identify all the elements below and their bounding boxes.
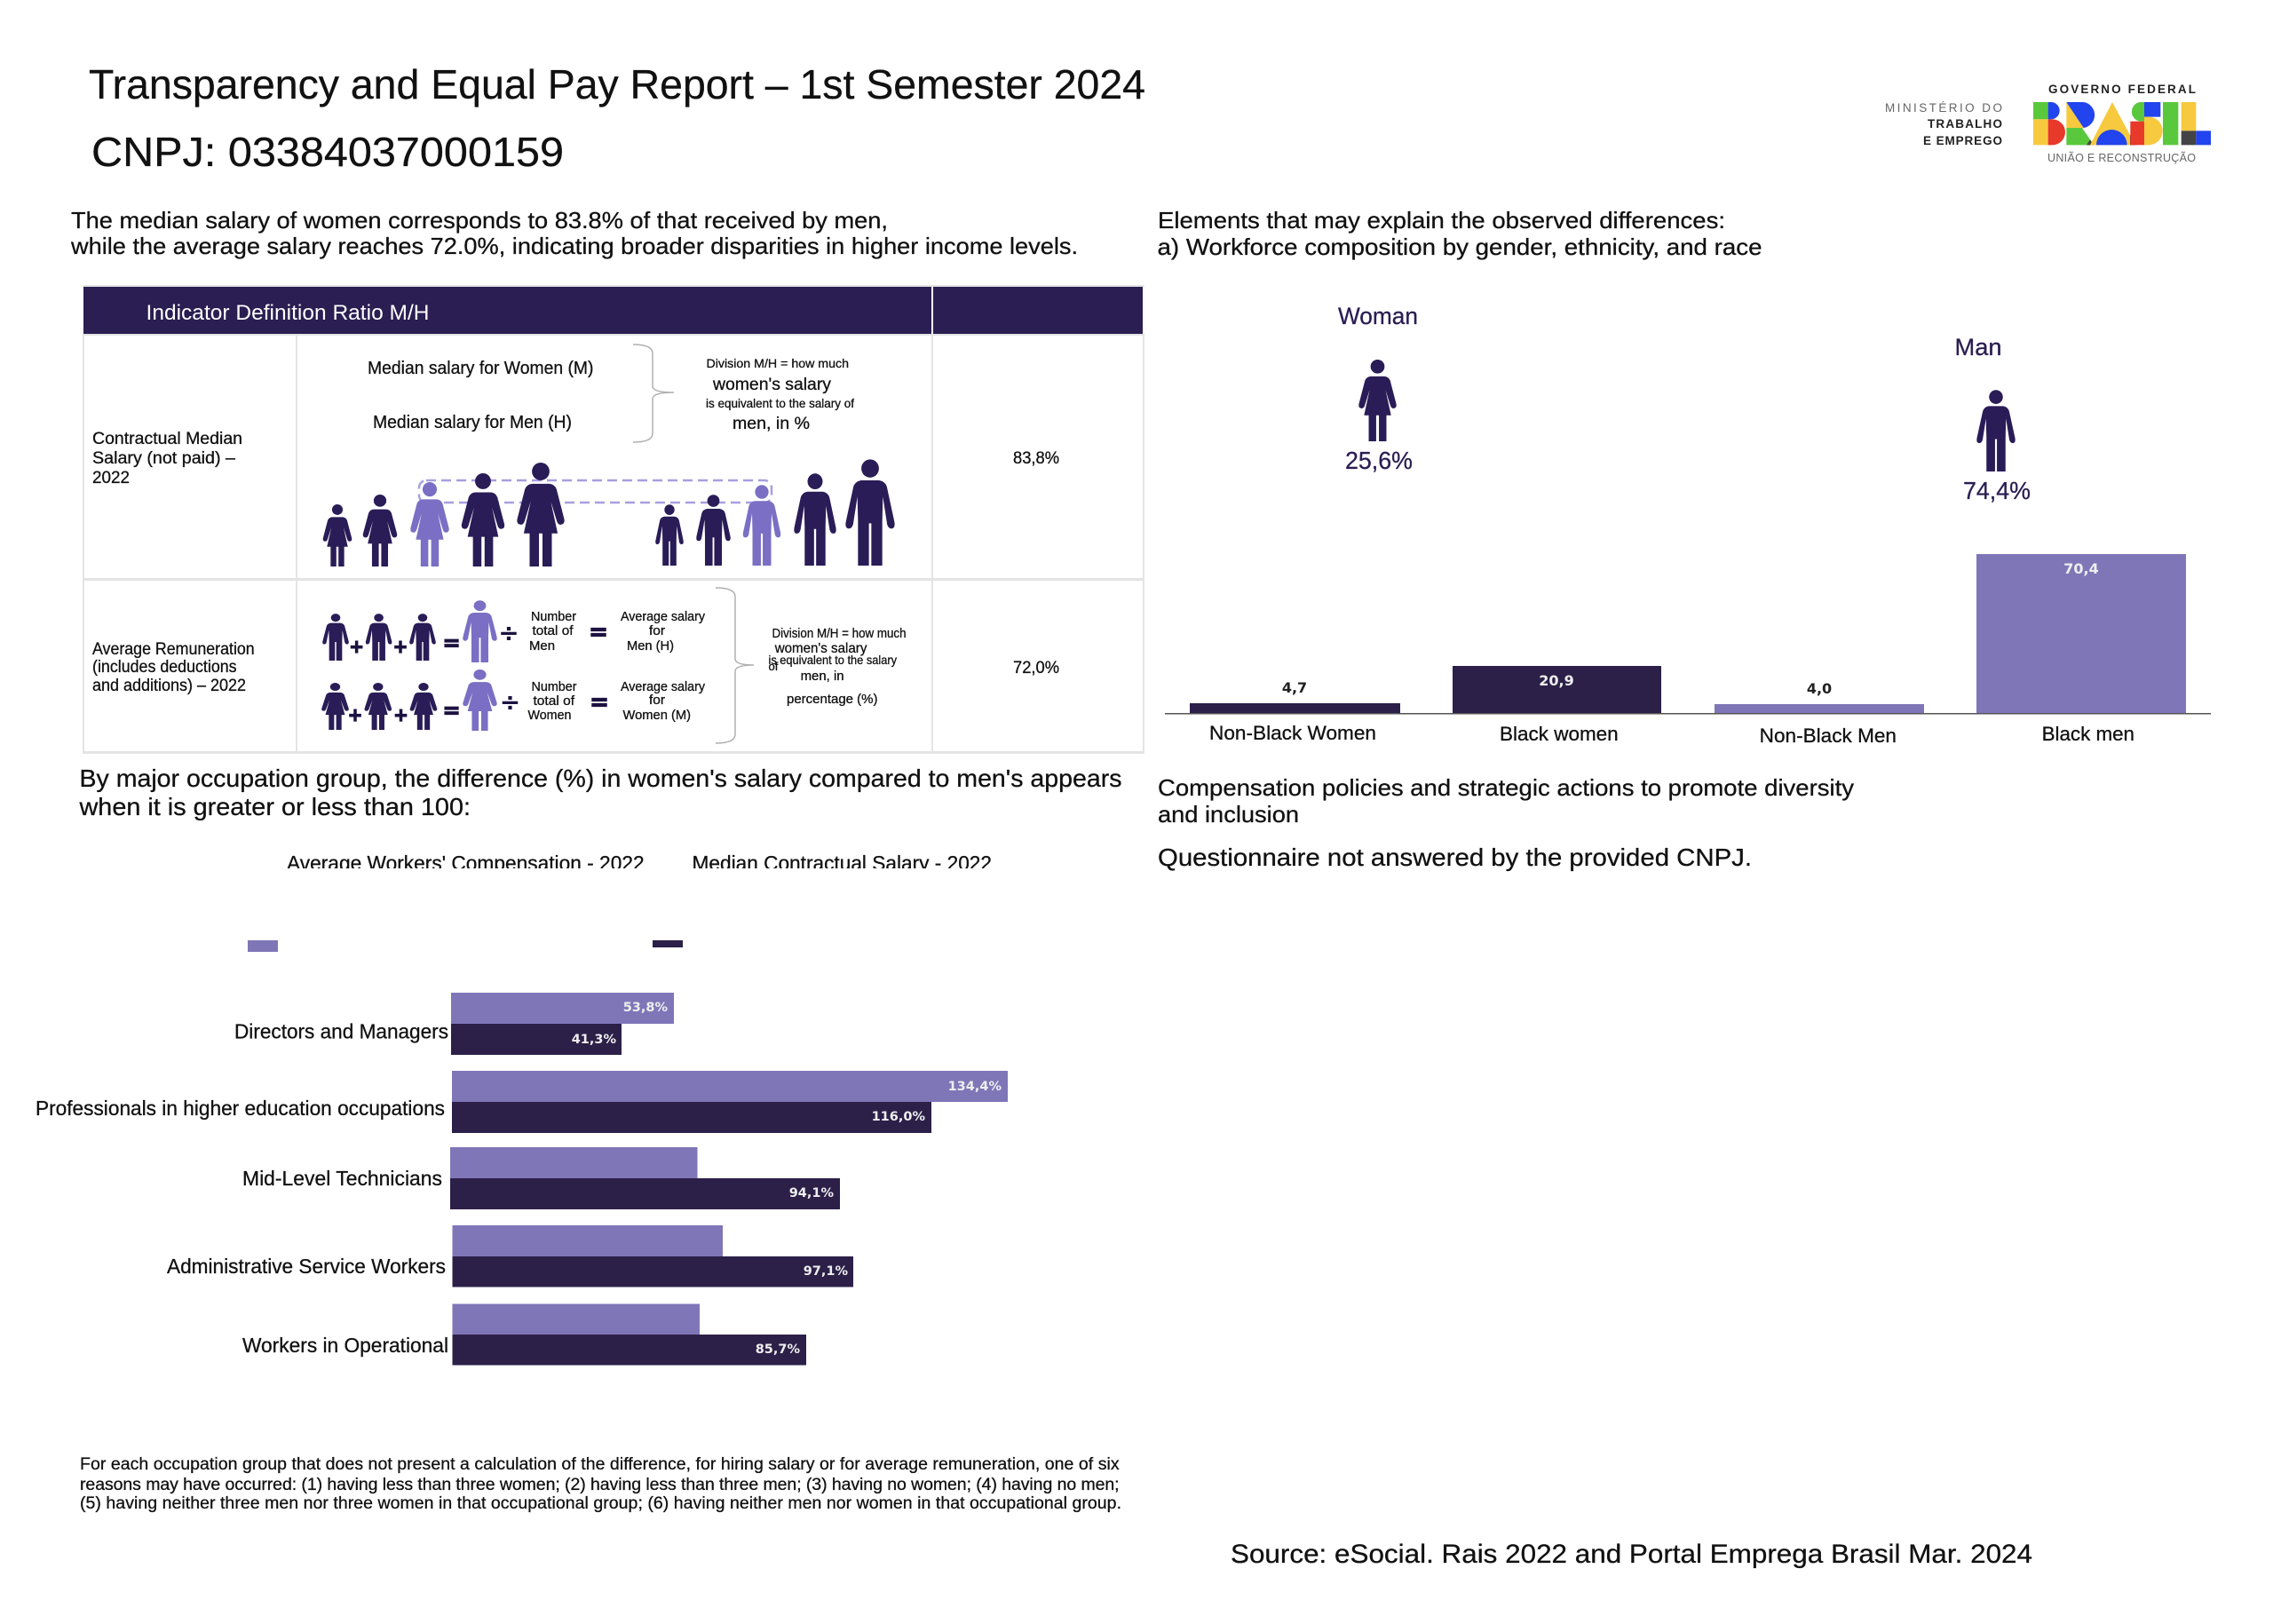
category: Mid-Level Technicians: 94,1% (789, 1186, 834, 1200)
row 2 definition text: Division M/H = how much (772, 627, 906, 641)
footnote: (5) having neither three men nor three women in that occupational group; (6) having neither men nor women in that occupational group. (80, 1493, 1121, 1513)
row 2 text: average for women: Number (531, 680, 577, 694)
bar: Non-Black Men: 4,0 (1807, 680, 1832, 697)
bar: Black men (1976, 554, 2186, 745)
panel: workforce composition (1165, 303, 2211, 747)
row 2 text: average for women: total of (533, 694, 575, 709)
bar: Black women (1453, 666, 1661, 745)
row 2 illustration: average for men: + (393, 636, 408, 657)
row 2 text: average for women: Women (M) (623, 709, 691, 723)
row 2 text: average for women (527, 680, 706, 723)
row 2 text: average for women: for (649, 693, 665, 708)
chart legend titles (288, 854, 991, 868)
footnote (80, 1454, 1121, 1513)
woman share: Woman (1338, 303, 1418, 329)
row 1 label: Contractual Median (92, 430, 242, 448)
category: Workers in Operational (242, 1303, 806, 1366)
occupation group intro text (78, 764, 1122, 820)
row 2 illustration: average for women: = (442, 698, 461, 723)
logo: ministry and Governo Federal Brasil: TRABALHO (1928, 117, 2002, 131)
compensation policies text: Questionnaire not answered by the provided CNPJ. (1158, 844, 1752, 871)
compensation policies text: and inclusion (1158, 801, 1299, 828)
row 1 value: 83,8% (1013, 449, 1059, 468)
compensation policies text (1158, 774, 1854, 871)
panel: indicator definition table (83, 285, 1144, 754)
row 1 definition text: Median salary for Men (H) (373, 413, 572, 432)
row 1 definition text: is equivalent to the salary of (706, 396, 854, 410)
table header: Indicator Definition Ratio M/H (146, 301, 430, 325)
row 2 illustration: average for women: + (393, 704, 408, 725)
row 2 illustration: average for women (321, 669, 609, 731)
row 2 text: average for men: for (649, 624, 665, 638)
occupation group intro text: when it is greater or less than 100: (78, 793, 471, 820)
category: Directors and Managers (234, 993, 674, 1055)
row 2 label: (includes deductions (92, 658, 237, 677)
row 2 text: average for men: Average salary (621, 610, 706, 624)
row 2 label: Average Remuneration (92, 640, 255, 659)
bar: Black men: 70,4 (2063, 560, 2099, 577)
right column heading text (1158, 207, 1762, 260)
category: Workers in Operational: 85,7% (756, 1343, 800, 1357)
panel: occupation bar chart (36, 852, 1008, 1366)
table grid (83, 285, 1144, 754)
row 1 illustration: people in order of salary (323, 459, 895, 566)
right column heading text: a) Workforce composition by gender, ethnicity, and race (1158, 234, 1762, 260)
source: Source: eSocial. Rais 2022 and Portal Emprega Brasil Mar. 2024 (1231, 1540, 2032, 1569)
category: Directors and Managers: Directors and Managers (234, 1019, 448, 1042)
row 2 label: and additions) – 2022 (92, 677, 246, 695)
logo: ministry and Governo Federal Brasil: MINISTÉRIO DO (1885, 101, 2002, 115)
row 2 illustration: average for men: + (349, 636, 364, 657)
row 2 illustration: average for men: = (442, 630, 461, 655)
category: Directors and Managers: 53,8% (623, 1001, 668, 1015)
woman share (1338, 303, 1418, 474)
row 1 definition text (368, 345, 854, 442)
row 2 text: average for men: Men (529, 639, 555, 654)
row 1 label (92, 430, 242, 487)
category: Professionals (36, 1071, 1008, 1133)
category: Administrative Service Workers (167, 1225, 853, 1287)
logo: ministry and Governo Federal Brasil: UNIÃO E RECONSTRUÇÃO (2047, 152, 2196, 164)
legend swatch: average compensation (248, 940, 278, 952)
row 1 definition text: Division M/H = how much (707, 356, 849, 370)
row 2 illustration: average for men: ÷ (498, 618, 519, 647)
footnote: reasons may have occurred: (1) having less than three women; (2) having less than three men; (3) having no women; (4) having no men; (80, 1475, 1120, 1494)
bar: Non-Black Women: Non-Black Women (1209, 722, 1376, 744)
chart legend titles: Median Contractual Salary - 2022 (693, 852, 992, 875)
category: Administrative Service Workers: Administrative Service Workers (167, 1255, 446, 1278)
category: Professionals: 134,4% (948, 1080, 1002, 1094)
row 2 illustration: average for women: + (348, 704, 362, 725)
logo: ministry and Governo Federal Brasil: E EMPREGO (1923, 134, 2002, 147)
category: Professionals: Professionals in higher education occupations (36, 1097, 445, 1120)
row 2 definition text: men, in (801, 669, 844, 684)
legend swatch: median salary (653, 940, 683, 947)
row 2 text: average for men: Men (H) (627, 639, 674, 654)
table header (83, 286, 1143, 334)
footnote: For each occupation group that does not present a calculation of the difference, for hiring salary or for average remuneration, one of six (80, 1454, 1120, 1474)
chart legend titles: Average Workers' Compensation - 2022 (287, 852, 645, 875)
row 2 definition text: is equivalent to the salary (769, 653, 897, 667)
man share (1955, 334, 2031, 504)
bar: Black women: 20,9 (1539, 672, 1574, 689)
occupation group intro text: By major occupation group, the difference (%) in women's salary compared to men's appears (80, 764, 1122, 792)
intro text block: The median salary of women corresponds to 83.8% of that received by men, (71, 207, 888, 234)
row 2 definition text (716, 588, 906, 743)
bar: Black men: Black men (2042, 723, 2134, 745)
man share: 74,4% (1963, 477, 2031, 504)
CNPJ heading: CNPJ: 03384037000159 (91, 129, 564, 175)
row 2 text: average for men: Number (531, 610, 576, 624)
bar: Non-Black Women (1190, 682, 1400, 740)
intro text block (70, 207, 1078, 259)
bar: Non-Black Men: Non-Black Men (1760, 725, 1897, 747)
category: Directors and Managers: 41,3% (572, 1033, 616, 1047)
bar: Non-Black Women: 4,7 (1282, 679, 1307, 696)
row 2 definition text: percentage (%) (787, 692, 877, 707)
row 2 illustration: average for men: = (589, 619, 608, 646)
row 2 illustration: average for women: = (590, 689, 609, 716)
woman share: 25,6% (1345, 447, 1413, 474)
bar: Non-Black Men (1715, 684, 1924, 742)
category: Mid-Level Technicians: Mid-Level Technicians (242, 1167, 442, 1190)
compensation policies text: Compensation policies and strategic actions to promote diversity (1158, 774, 1854, 801)
row 2 definition text: of (769, 660, 779, 673)
title: Transparency and Equal Pay Report – 1st Semester 2024 (89, 61, 1145, 107)
man share: Man (1955, 334, 2001, 360)
row 2 text: average for women: Women (527, 709, 572, 723)
row 1 definition text: Median salary for Women (M) (368, 359, 593, 378)
row 2 definition text: women's salary (774, 641, 867, 656)
logo: ministry and Governo Federal Brasil: GOVERNO FEDERAL (2048, 83, 2196, 96)
category: Mid-Level Technicians (242, 1147, 840, 1209)
intro text block: while the average salary reaches 72.0%, indicating broader disparities in higher income levels. (70, 233, 1078, 259)
row 1 label: 2022 (92, 469, 130, 487)
row 2 text: average for women: Average salary (621, 680, 706, 694)
right column heading text: Elements that may explain the observed differences: (1158, 207, 1725, 234)
row 1 definition text: men, in % (733, 415, 810, 433)
bar: Black women: Black women (1500, 723, 1619, 745)
logo: ministry and Governo Federal Brasil (1885, 83, 2211, 164)
category: Administrative Service Workers: 97,1% (804, 1264, 848, 1279)
row 2 text: average for men (529, 610, 706, 654)
row 1 label: Salary (not paid) – (92, 449, 235, 468)
category: Workers in Operational: Workers in Operational (242, 1334, 448, 1357)
row 1 definition text: women's salary (712, 376, 832, 394)
row 2 illustration: average for men (322, 600, 608, 662)
row 2 illustration: average for women: ÷ (500, 687, 520, 717)
row 2 text: average for men: total of (533, 624, 574, 638)
row 2 label (92, 640, 255, 695)
row 2 value: 72,0% (1013, 659, 1059, 677)
category: Professionals: 116,0% (872, 1110, 925, 1124)
